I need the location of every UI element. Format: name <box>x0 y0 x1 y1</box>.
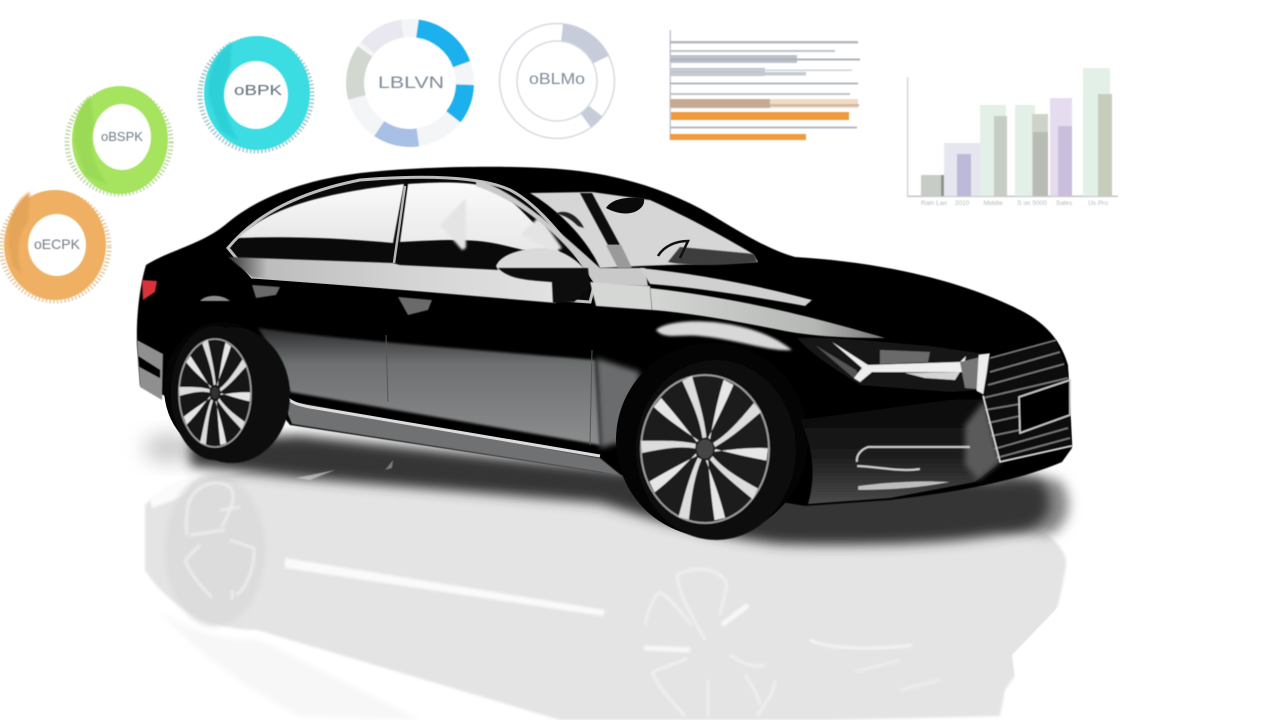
rear wheel <box>171 326 290 463</box>
front bumper <box>800 395 1000 504</box>
door panels <box>258 328 600 445</box>
gauge: green: oBSPK <box>101 129 143 144</box>
gauge: teal: oBPK <box>234 82 282 99</box>
silver pillar section <box>590 282 652 310</box>
bumper corner grey <box>965 400 1000 480</box>
front wheel <box>636 360 796 540</box>
rear side window <box>238 184 404 243</box>
interior seat shapes <box>440 198 562 252</box>
front side window <box>400 182 566 260</box>
door seams <box>386 335 592 445</box>
fender highlight <box>656 321 792 350</box>
horizontal bar chart <box>670 30 860 140</box>
car <box>137 167 1072 540</box>
ground shadow <box>144 434 1069 545</box>
window pillar line <box>394 186 405 263</box>
tail light <box>142 280 157 300</box>
column chart: Middle <box>983 200 1003 207</box>
grille <box>978 340 1072 462</box>
silver A pillar <box>476 180 648 286</box>
driver head silhouette <box>555 212 584 228</box>
window frame <box>228 177 595 302</box>
car body shell <box>137 167 1072 506</box>
gauge: orange <box>1 190 109 301</box>
door handles <box>252 285 432 315</box>
lower sill <box>282 400 622 476</box>
gauge: teal <box>200 36 312 151</box>
silver hood upper band <box>640 268 812 306</box>
front wheel arch <box>616 343 808 537</box>
gauge: segmented blue donut: LBLVN <box>378 73 444 92</box>
windshield <box>530 192 758 268</box>
gauge: thin gray donut: oBLMo <box>529 71 585 88</box>
column chart: Rain Lan <box>921 200 947 207</box>
gauge: segmented blue donut <box>333 6 487 160</box>
wing mirror <box>496 248 586 278</box>
rear wheel arch <box>164 322 280 454</box>
front air intake <box>857 447 970 470</box>
gauge: green <box>67 86 171 194</box>
chrome side strip <box>286 396 600 456</box>
silver hood lower band <box>650 288 885 338</box>
dashboard <box>668 247 757 265</box>
A pillar and interior <box>580 193 620 245</box>
silver shoulder reflection <box>228 257 556 303</box>
gauge: orange: oECPK <box>34 236 81 252</box>
rear reflection spots <box>200 296 230 301</box>
lower windscreen post <box>606 245 632 268</box>
column chart: 2010 <box>955 200 970 207</box>
column chart: Us Pro <box>1088 200 1108 207</box>
column chart <box>907 68 1118 207</box>
headlight <box>797 338 990 392</box>
car reflection on floor <box>145 468 1066 720</box>
front fender lower panel <box>596 358 640 448</box>
gauge: thin gray donut <box>488 12 626 150</box>
column chart: Sales <box>1056 200 1073 207</box>
steering wheel <box>658 241 688 258</box>
column chart: S on 5000 <box>1017 200 1047 207</box>
rear bumper detail <box>137 340 163 400</box>
lower lip highlight <box>858 481 950 490</box>
interior mirror <box>606 198 644 213</box>
